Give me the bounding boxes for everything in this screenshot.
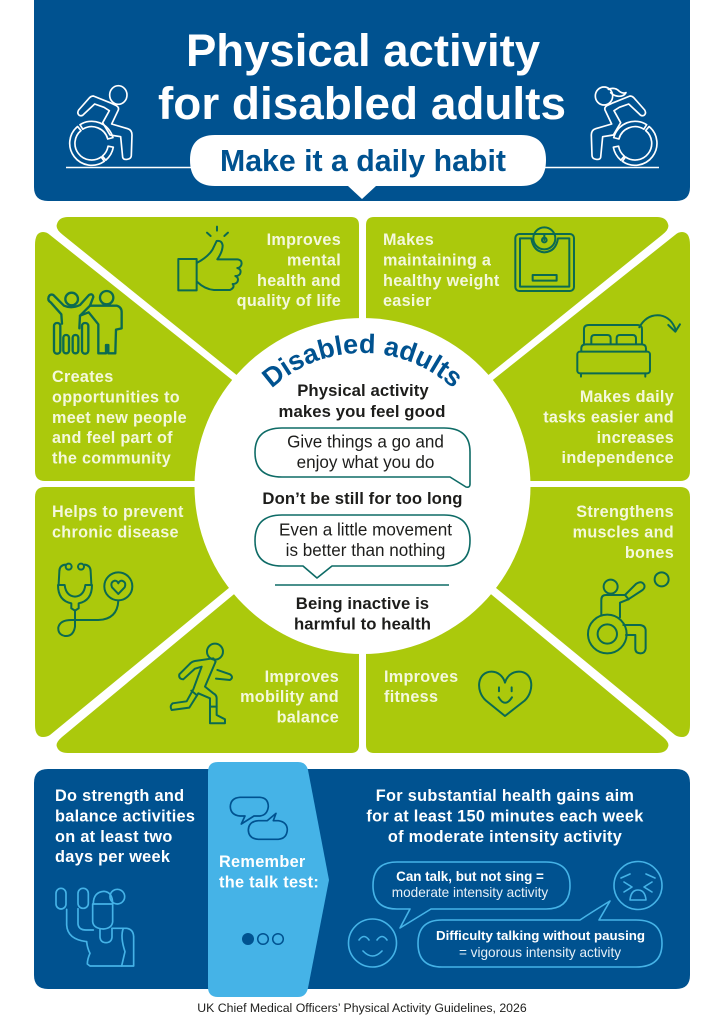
title: for disabled adults [158,78,566,129]
speech bubble: moderate: moderate intensity activity [392,885,548,900]
speech bubble: even a little movement: Even a little movement [279,520,452,540]
icon: thumbs up [178,227,242,290]
speech bubble: even a little movement [255,515,470,578]
text: muscles and bones: bones [625,544,674,562]
text: strength and balance: days per week [55,848,171,866]
subtitle speech pill [190,135,546,199]
text: 150 minutes: of moderate intensity activity [388,828,622,846]
icon: three dots [242,933,283,945]
text: mobility and balance: mobility and [240,688,339,706]
text: muscles and bones: Strengthens [576,503,674,521]
speech bubble: give things a go [255,428,470,487]
text: fitness: fitness [384,688,438,706]
speech bubble: moderate: Can talk, but not sing = [396,869,544,884]
icon: smiling face [348,919,396,967]
text: daily tasks: Makes daily [580,388,674,406]
text: remember the talk test: the talk test: [219,874,319,892]
title: Physical activity [186,25,541,76]
icon: speech bubbles [230,797,287,839]
text: daily tasks: increases [597,429,674,447]
panel: fitness [366,556,668,753]
speech bubble: vigorous: Difficulty talking without pausing [436,928,645,943]
bottom panel [34,762,690,997]
message: feel good: makes you feel good [279,402,445,421]
text: mobility and balance: Improves [265,668,339,686]
panel: mobility and balance [57,556,359,753]
curved heading: Disabled adults [261,334,460,388]
speech bubble: vigorous: = vigorous intensity activity [459,945,621,960]
text: daily tasks: tasks easier and [543,408,674,426]
panel: daily tasks [445,232,690,481]
text: strength and balance: on at least two [55,828,173,846]
text: healthy weight: healthy weight [383,272,500,290]
icon: bed with arrow [577,315,680,377]
text: mental health: health and [257,272,341,290]
text: healthy weight: maintaining a [383,252,492,270]
speech bubble: vigorous [418,901,662,967]
text: daily tasks: independence [562,449,674,467]
message: feel good: Physical activity [297,381,429,400]
icon: stethoscope with heart [58,564,132,636]
text: community: Creates [52,368,114,386]
blue tab: talk test [208,762,329,997]
ground lines [66,166,659,168]
text: mental health: quality of life [237,292,341,310]
text: remember the talk test: Remember [219,853,306,871]
speech bubble: give things a go: Give things a go and [287,432,444,452]
text: community: the community [52,450,171,468]
text: 150 minutes: For substantial health gains aim [376,787,634,805]
icon: strained face [614,862,662,910]
speech bubble: even a little movement: is better than nothing [286,541,445,560]
icon: woman with raised arm [56,888,134,966]
icon: active wheelchair user left [70,86,132,165]
central circle [194,318,530,654]
text: muscles and bones: muscles and [573,524,674,542]
header panel [34,0,690,201]
text: chronic disease: Helps to prevent [52,503,184,521]
talk test examples [348,862,662,967]
text: community: opportunities to [52,388,180,406]
panel: community [35,232,280,481]
text: mental health: Improves [267,231,341,249]
text: fitness: Improves [384,668,458,686]
text: mobility and balance: balance [277,708,339,726]
source footnote: UK Chief Medical Officers’ Physical Activity Guidelines, 2026 [197,1001,527,1015]
speech bubble: give things a go: enjoy what you do [297,453,434,472]
icon: wheelchair user with ball [588,572,669,653]
subtitle speech pill: Make it a daily habit [220,144,506,178]
message: don't be still: Don’t be still for too long [262,489,463,508]
icon: two people high five [48,291,122,354]
panel: muscles and bones [445,487,690,737]
text: community: meet new people [52,409,187,427]
text: healthy weight: Makes [383,231,434,249]
text: strength and balance: balance activities [55,808,195,826]
text: mental health: mental [287,252,341,270]
message: being inactive: Being inactive is [296,594,429,613]
icon: weighing scale [515,227,574,291]
text: healthy weight: easier [383,292,432,310]
message: being inactive: harmful to health [294,614,431,634]
panel: chronic disease [35,487,280,737]
text: strength and balance: Do strength and [55,787,184,805]
text: 150 minutes: for at least 150 minutes each week [366,808,644,826]
icon: smiling heart [479,672,531,716]
panel: mental health [57,217,359,410]
text: chronic disease: chronic disease [52,524,179,542]
speech bubble: moderate [373,862,570,928]
panel: healthy weight [366,217,668,410]
text: community: and feel part of [52,429,173,447]
icon: runner [171,644,232,723]
icon: active wheelchair user right [591,87,657,165]
